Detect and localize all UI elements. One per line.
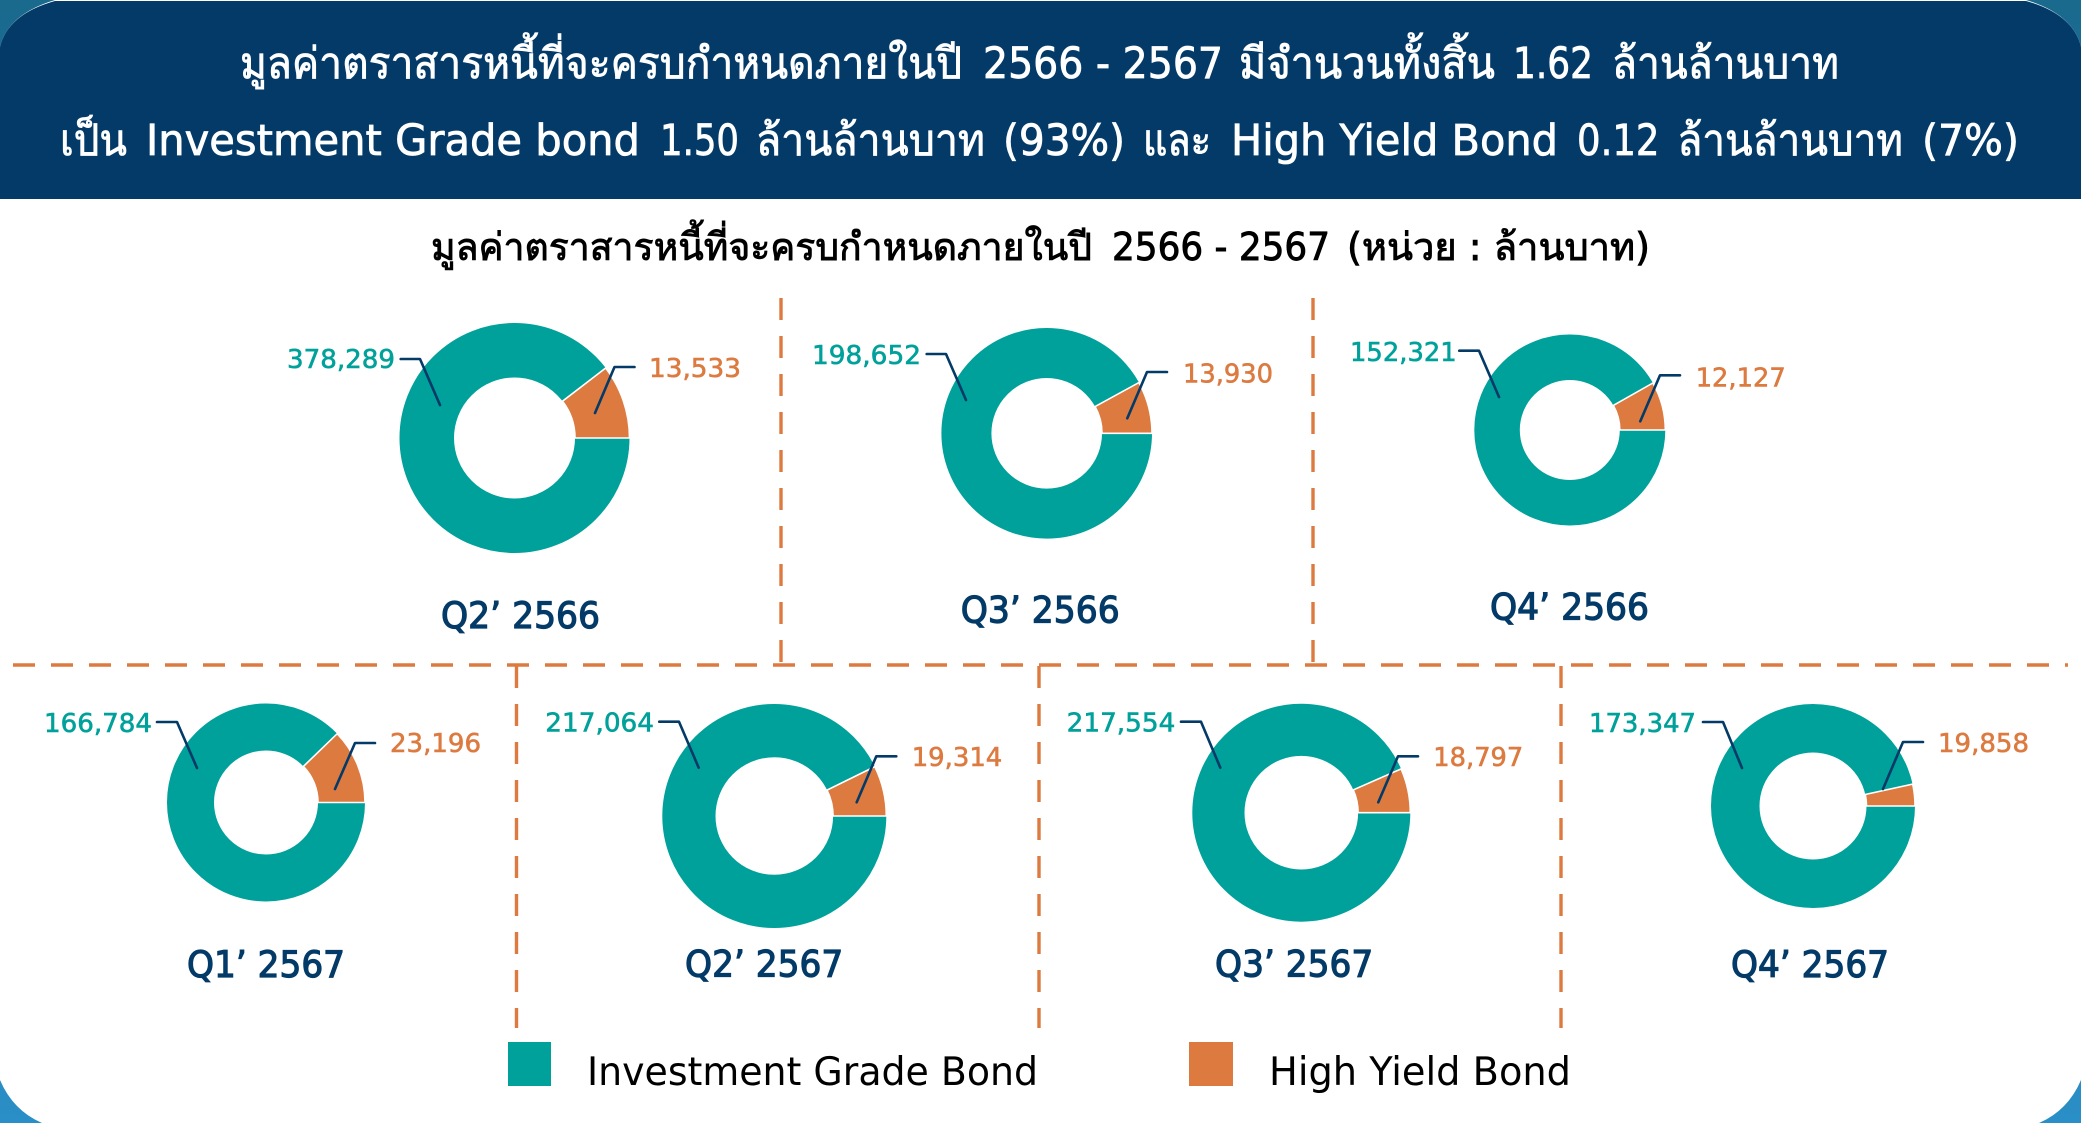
headline: ล้านล้านบาท (1612, 39, 1839, 89)
donut: Q2 2566: 378,289 (287, 345, 395, 375)
header band (0, 1, 2081, 199)
donut: Q2 2567 (545, 709, 1002, 986)
donut: Q3 2567 (1067, 709, 1523, 986)
headline: 0.12 (1577, 116, 1660, 166)
headline (60, 32, 2019, 166)
donut: Q1 2567: 166,784 (44, 709, 152, 739)
headline: มีจำนวนทั้งสิ้น (1239, 32, 1495, 89)
donut: Q4 2566: Q4’ 2566 (1490, 585, 1649, 628)
donut: Q3 2566: 13,930 (1183, 360, 1273, 390)
donut: Q4 2566 (1350, 338, 1786, 628)
legend item: High Yield Bond: High Yield Bond (1269, 1050, 1571, 1095)
donut: Q3 2567: 18,797 (1433, 743, 1523, 773)
headline: มูลค่าตราสารหนี้ที่จะครบกำหนดภายในปี (240, 32, 962, 90)
donut: Q2 2567: 217,064 (545, 709, 654, 739)
headline: ล้านล้านบาท (1678, 116, 1903, 166)
headline: 2566 - 2567 (983, 39, 1223, 89)
donut: Q2 2566: Q2’ 2566 (441, 594, 600, 637)
headline: (93%) (1003, 116, 1125, 166)
legend item: Investment Grade Bond: Investment Grade Bond (587, 1050, 1038, 1095)
donut: Q2 2567: Q2’ 2567 (685, 943, 843, 986)
donut: Q3 2566 (812, 341, 1273, 632)
donut: Q2 2566 (287, 345, 741, 637)
chart section heading: (หน่วย : ล้านบาท) (1347, 225, 1650, 269)
headline: Investment Grade bond (146, 116, 640, 166)
donut: Q3 2567: 217,554 (1067, 709, 1175, 739)
donut: Q3 2566: Q3’ 2566 (961, 589, 1120, 632)
headline: และ (1143, 116, 1211, 166)
donut: Q4 2567: 19,858 (1938, 729, 2029, 759)
donut: Q2 2567: 19,314 (912, 743, 1002, 773)
chart section heading: 2566 - 2567 (1112, 225, 1330, 269)
chart section heading: มูลค่าตราสารหนี้ที่จะครบกำหนดภายในปี (431, 219, 1092, 270)
chart section heading (431, 219, 1650, 270)
donut: Q1 2567: Q1’ 2567 (187, 943, 345, 986)
donut: Q1 2567: 23,196 (390, 729, 481, 759)
donut: Q2 2566: 13,533 (649, 354, 741, 384)
donut: Q4 2567 (1589, 709, 2029, 986)
headline: ล้านล้านบาท (756, 116, 985, 166)
donut: Q1 2567 (44, 709, 481, 986)
donut: Q3 2566: 198,652 (812, 341, 921, 371)
headline: เป็น (60, 115, 127, 166)
donut: Q3 2567: Q3’ 2567 (1215, 943, 1373, 986)
donut: Q4 2567: 173,347 (1589, 709, 1696, 739)
headline: High Yield Bond (1231, 116, 1558, 166)
headline: (7%) (1922, 116, 2019, 166)
headline: 1.50 (660, 116, 739, 166)
donut: Q4 2566: 12,127 (1696, 363, 1786, 393)
legend (508, 1042, 1571, 1095)
donut: Q4 2567: Q4’ 2567 (1731, 943, 1889, 986)
legend item: High Yield Bond (1189, 1042, 1571, 1095)
headline: 1.62 (1513, 39, 1593, 89)
donut: Q4 2566: 152,321 (1350, 338, 1457, 368)
